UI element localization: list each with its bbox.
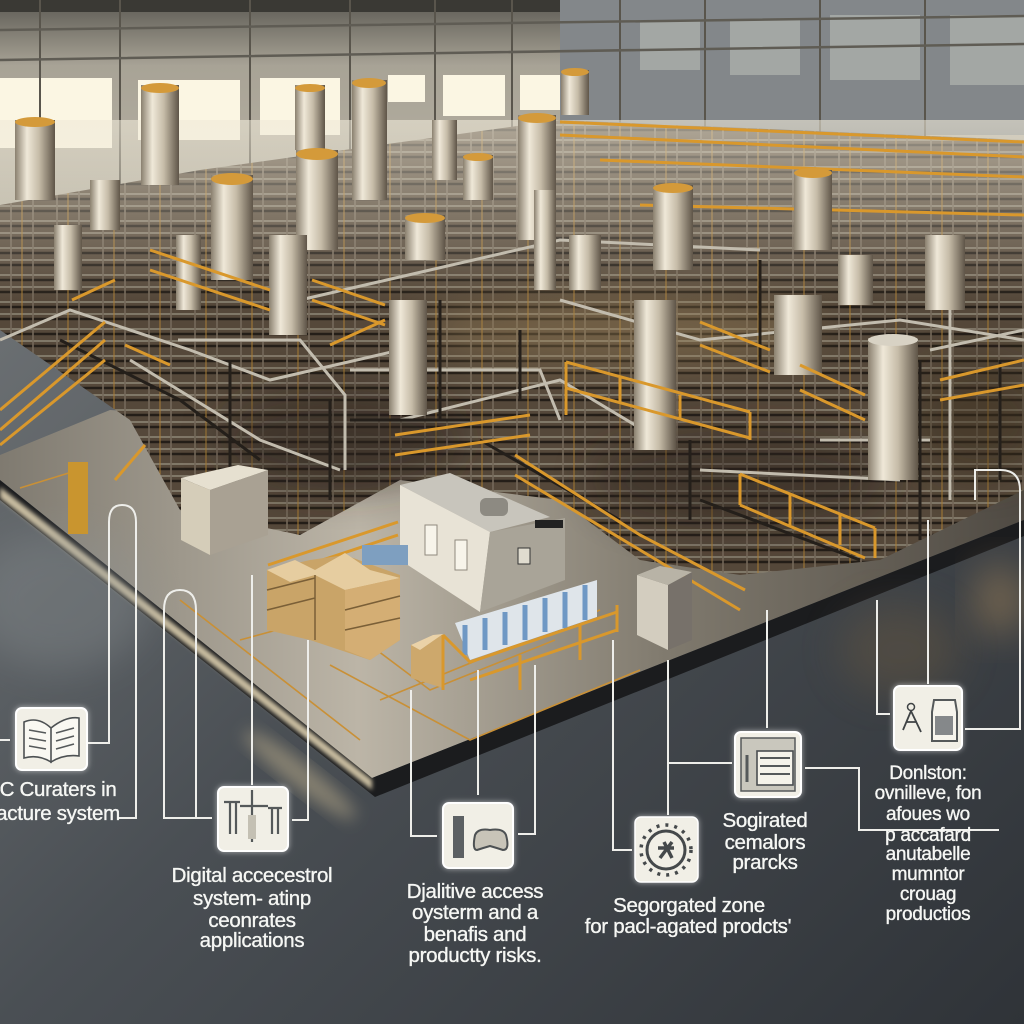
label: access system: productty risks. [408, 944, 542, 967]
label: production monitor: crouag [900, 884, 956, 905]
packaged bottles on conveyor [443, 580, 617, 690]
yellow safety railings [0, 250, 1024, 610]
icon: person and container [894, 686, 962, 750]
icon: panel document [735, 732, 801, 797]
label: manual: C Curaters in [0, 778, 116, 801]
central white machine room [400, 473, 565, 612]
label: access system: oysterm and a [412, 901, 539, 924]
label: digital access control: ceonrates [208, 909, 296, 932]
callout 6: production monitor [875, 686, 981, 925]
callout 4: segregated zone [585, 817, 791, 938]
floor platform [0, 410, 1024, 797]
right electrical cabinet [637, 566, 692, 650]
label: digital access control: applications [200, 929, 304, 952]
storage tanks [15, 68, 965, 480]
label: access system: benafis and [424, 923, 526, 946]
label: access system: Djalitive access [407, 880, 543, 903]
label: digital access control: system- atinp [193, 887, 311, 910]
label: segregated zone: Segorgated zone [613, 894, 765, 917]
callout 1: manual [0, 708, 120, 825]
callout 2: digital access control [172, 787, 332, 952]
blue drum stack [362, 545, 408, 565]
factory back wall and windows [0, 0, 1024, 330]
small box stack [411, 634, 443, 688]
label: production monitor: afoues wo [886, 804, 970, 825]
label: production monitor: mumntor [892, 864, 965, 885]
icon: columns [218, 787, 288, 851]
label: control panel: prarcks [732, 851, 798, 874]
left control cabinets [181, 465, 268, 555]
small hazard sign post [68, 462, 88, 534]
pipe and equipment mass [0, 120, 1024, 575]
callout 5: control panel [722, 732, 808, 874]
label: production monitor: productios [886, 904, 970, 925]
callout connector lines [0, 470, 1020, 850]
label: production monitor: p accafard [885, 825, 971, 846]
label: production monitor: Donlston: [889, 763, 967, 784]
icon: cylinder and controller [443, 803, 513, 868]
label: production monitor: ovnilleve, fon [875, 783, 981, 804]
label: digital access control: Digital accecestrol [172, 864, 332, 887]
label: production monitor: anutabelle [886, 844, 970, 865]
label: segregated zone: for pacl-agated prodcts' [585, 915, 791, 938]
soft light on the dark floor [0, 530, 1024, 828]
icon: gear virus [635, 817, 698, 882]
label: control panel: Sogirated [722, 809, 808, 832]
label: control panel: cemalors [725, 831, 805, 854]
callout 3: access system [407, 803, 543, 967]
icon: open book [16, 708, 87, 770]
stacked cardboard boxes [267, 553, 400, 660]
